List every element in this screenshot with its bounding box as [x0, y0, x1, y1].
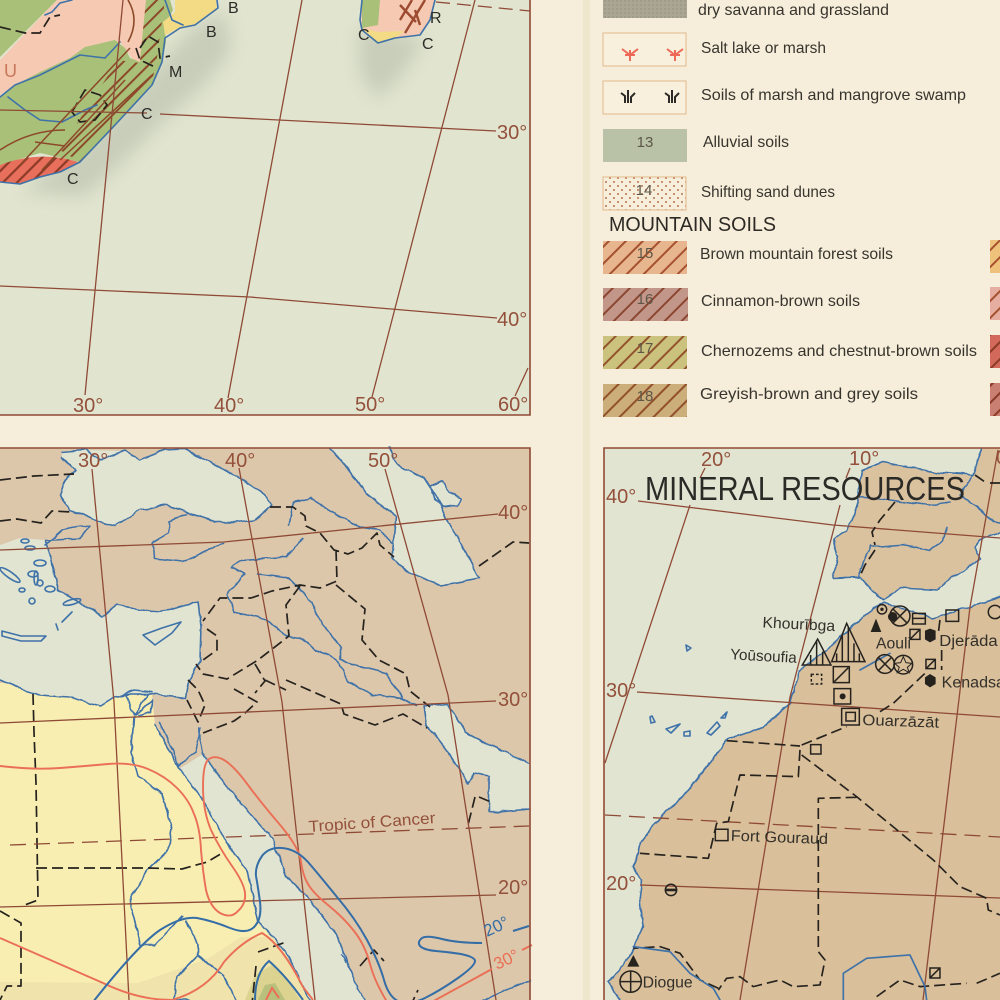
- soil code U: U: [4, 61, 17, 81]
- longitude and latitude labels: 20°: [606, 873, 636, 895]
- Madagascar tip: [360, 0, 435, 43]
- panel: mineral resources map (bottom right): [604, 447, 1000, 1000]
- islands: [0, 539, 181, 645]
- page fold: [583, 0, 590, 1000]
- red isotherms: [0, 757, 532, 1000]
- Red Sea: [179, 754, 365, 1000]
- heading: mountain soils: MOUNTAIN SOILS: [609, 214, 776, 236]
- swatch: marsh and mangrove: Soils of marsh and mangrove swamp: [701, 87, 966, 104]
- land: pink soils: [0, 0, 160, 95]
- symbol cluster north Morocco: [871, 605, 1000, 687]
- Ethiopian highland tint: [245, 965, 300, 1000]
- swatch: salt lake: [603, 33, 826, 66]
- soil letter labels: [67, 0, 442, 188]
- Africa coastline: [0, 0, 218, 184]
- dashed boundaries: [0, 15, 170, 122]
- longitude and latitude labels: 30°: [73, 395, 103, 417]
- swatch 17: Chernozems and chestnut-brown soils: [701, 343, 977, 360]
- soil letter labels: C: [358, 27, 370, 44]
- land: hatched southern belt: [60, 60, 155, 162]
- swatch 10: dry savanna: dry savanna and grassland: [698, 2, 889, 19]
- Africa: yellow zone: [0, 683, 310, 1000]
- Atlas river: [860, 653, 890, 670]
- soil letter labels: C: [422, 36, 434, 53]
- mineral place names: Fort Gouraud: [731, 828, 828, 848]
- Iberia and France: [833, 448, 1000, 600]
- rivers: [0, 0, 183, 122]
- coastlines: [608, 448, 1000, 1000]
- swatch 15: 15: [637, 245, 653, 262]
- swatch: salt lake: Salt lake or marsh: [701, 40, 826, 57]
- swatch 18: 18: [637, 388, 653, 405]
- cropped swatches at right edge: [990, 240, 1000, 416]
- political boundaries: [633, 620, 1000, 997]
- isotherm labels: [481, 913, 522, 974]
- mineral place names: Djerāda: [939, 633, 998, 650]
- panel frame: [0, 448, 530, 1000]
- swatch 17: [603, 336, 977, 369]
- Caspian Sea: [330, 448, 479, 585]
- symbol: eastern square: [930, 968, 940, 978]
- symbol: dotted square: [811, 674, 822, 684]
- tropic of Capricorn: [436, 2, 530, 11]
- panel: soils map of Africa (top left): [0, 0, 530, 417]
- Black Sea: [60, 449, 272, 526]
- soil letter labels: C: [67, 171, 79, 188]
- mineral place names: Diogue: [643, 974, 693, 991]
- soil letter labels: B: [206, 24, 217, 41]
- longitude and latitude labels: 10°: [849, 448, 879, 470]
- longitude and latitude labels: 60°: [498, 394, 528, 416]
- longitude and latitude labels: [73, 122, 528, 417]
- isotherm labels: 30°: [491, 946, 522, 974]
- longitude and latitude labels: 40°: [225, 450, 255, 472]
- longitude and latitude labels: 40°: [606, 486, 636, 508]
- symbol: Ouarzazat double square: [842, 708, 859, 725]
- swatch 17: 17: [637, 340, 653, 357]
- mineral place names: Yoūsoufia: [730, 646, 798, 667]
- longitude and latitude labels: 30°: [606, 680, 636, 702]
- symbol: Khouribga phosphate triangle: [832, 623, 865, 662]
- land: yellow soils: [163, 0, 217, 35]
- label: Tropic of Cancer: Tropic of Cancer: [308, 810, 437, 836]
- mineral place names: [643, 614, 1000, 991]
- Aral lake: [430, 481, 461, 507]
- soil letter labels: B: [228, 0, 239, 17]
- tropic of Cancer line: [10, 826, 529, 845]
- map grid: [0, 468, 498, 1000]
- longitude and latitude labels: 20°: [498, 877, 528, 899]
- symbol: circle with band: [665, 884, 677, 896]
- longitude and latitude labels: 50°: [355, 394, 385, 416]
- swatch 16: [603, 288, 860, 321]
- Iberian boundary: [860, 475, 1000, 576]
- swatch 13: alluvial soils: 13: [637, 134, 653, 151]
- longitude and latitude labels: 40°: [498, 502, 528, 524]
- land: green soils: [0, 0, 57, 57]
- swatch 13: alluvial soils: [603, 129, 789, 162]
- swatch 14: sand dunes: [603, 177, 835, 210]
- north-west Africa: [608, 597, 1000, 1000]
- river hatch: [20, 48, 152, 170]
- symbol: empty square: [811, 745, 821, 754]
- symbol: square crossed: [833, 667, 849, 683]
- longitude and latitude labels: 40°: [214, 395, 244, 417]
- soil letter labels: M: [169, 64, 182, 81]
- swatch 16: Cinnamon-brown soils: [701, 293, 860, 310]
- mineral place names: Khourībga: [762, 614, 836, 635]
- Atlantic islands: [650, 645, 727, 736]
- mineral place names: Ouarzāzāt: [862, 712, 940, 732]
- swatch 16: 16: [637, 291, 653, 308]
- dashed political boundaries: [0, 474, 529, 1000]
- Arabia: southern yellow: [320, 985, 358, 1000]
- longitude and latitude labels: 20°: [701, 449, 731, 471]
- swatch 18: Greyish-brown and grey soils: [700, 386, 918, 403]
- Persian Gulf: [424, 704, 530, 812]
- isotherm labels: 20°: [481, 913, 512, 941]
- map grid: [605, 450, 1000, 1000]
- symbol: Diogue triangle and cross circle: [620, 955, 641, 992]
- soil letter labels: C: [141, 106, 153, 123]
- panel frame: [604, 448, 1000, 1000]
- symbol: Fort Gouraud square: [715, 829, 728, 841]
- coastal shading: [20, 10, 425, 197]
- Mediterranean Sea: [0, 538, 201, 706]
- longitude and latitude labels: 30°: [497, 122, 527, 144]
- longitude and latitude labels: 30°: [78, 450, 108, 472]
- panel frame: [0, 0, 530, 415]
- Senegal river: [633, 947, 927, 1000]
- land: hatched mountain strip: [140, 0, 165, 65]
- mineral symbols: [620, 605, 1000, 992]
- Africa: southern savanna zone: [0, 937, 310, 1000]
- swatch 13: alluvial soils: Alluvial soils: [703, 134, 789, 151]
- land: red hatched tip: [0, 157, 78, 184]
- title: mineral resources: MINERAL RESOURCES: [645, 470, 965, 507]
- symbol: Youssoufia phosphate triangle: [802, 639, 831, 665]
- symbol: square with dot: [834, 689, 851, 704]
- panel: legend: [603, 0, 1000, 417]
- swatch: marsh and mangrove: [603, 81, 966, 114]
- longitude and latitude labels: 30°: [498, 689, 528, 711]
- blue isotherms: [93, 848, 529, 1000]
- longitude and latitude labels: [78, 450, 528, 899]
- soil letter labels: R: [430, 10, 442, 27]
- swatch 10: dry savanna: [603, 0, 889, 19]
- swatch 15: Brown mountain forest soils: [700, 246, 893, 263]
- coastlines: [0, 448, 530, 1000]
- land: southern green soils: [0, 0, 173, 165]
- tropic line: [605, 815, 1000, 837]
- swatch 14: sand dunes: Shifting sand dunes: [701, 184, 835, 201]
- escarpment line: [0, 0, 134, 150]
- rivers: [117, 498, 530, 1000]
- swatch 14: sand dunes: 14: [636, 182, 652, 199]
- swatch 18: [603, 384, 918, 417]
- longitude and latitude labels: [606, 447, 1000, 895]
- swatch 15: [603, 241, 893, 274]
- map grid: [0, 0, 528, 398]
- longitude and latitude labels: 40°: [497, 309, 527, 331]
- longitude and latitude labels: 50°: [368, 450, 398, 472]
- panel: climate map of Middle East and North Africa (bottom left): [0, 448, 532, 1000]
- mineral place names: Aouli: [876, 636, 911, 653]
